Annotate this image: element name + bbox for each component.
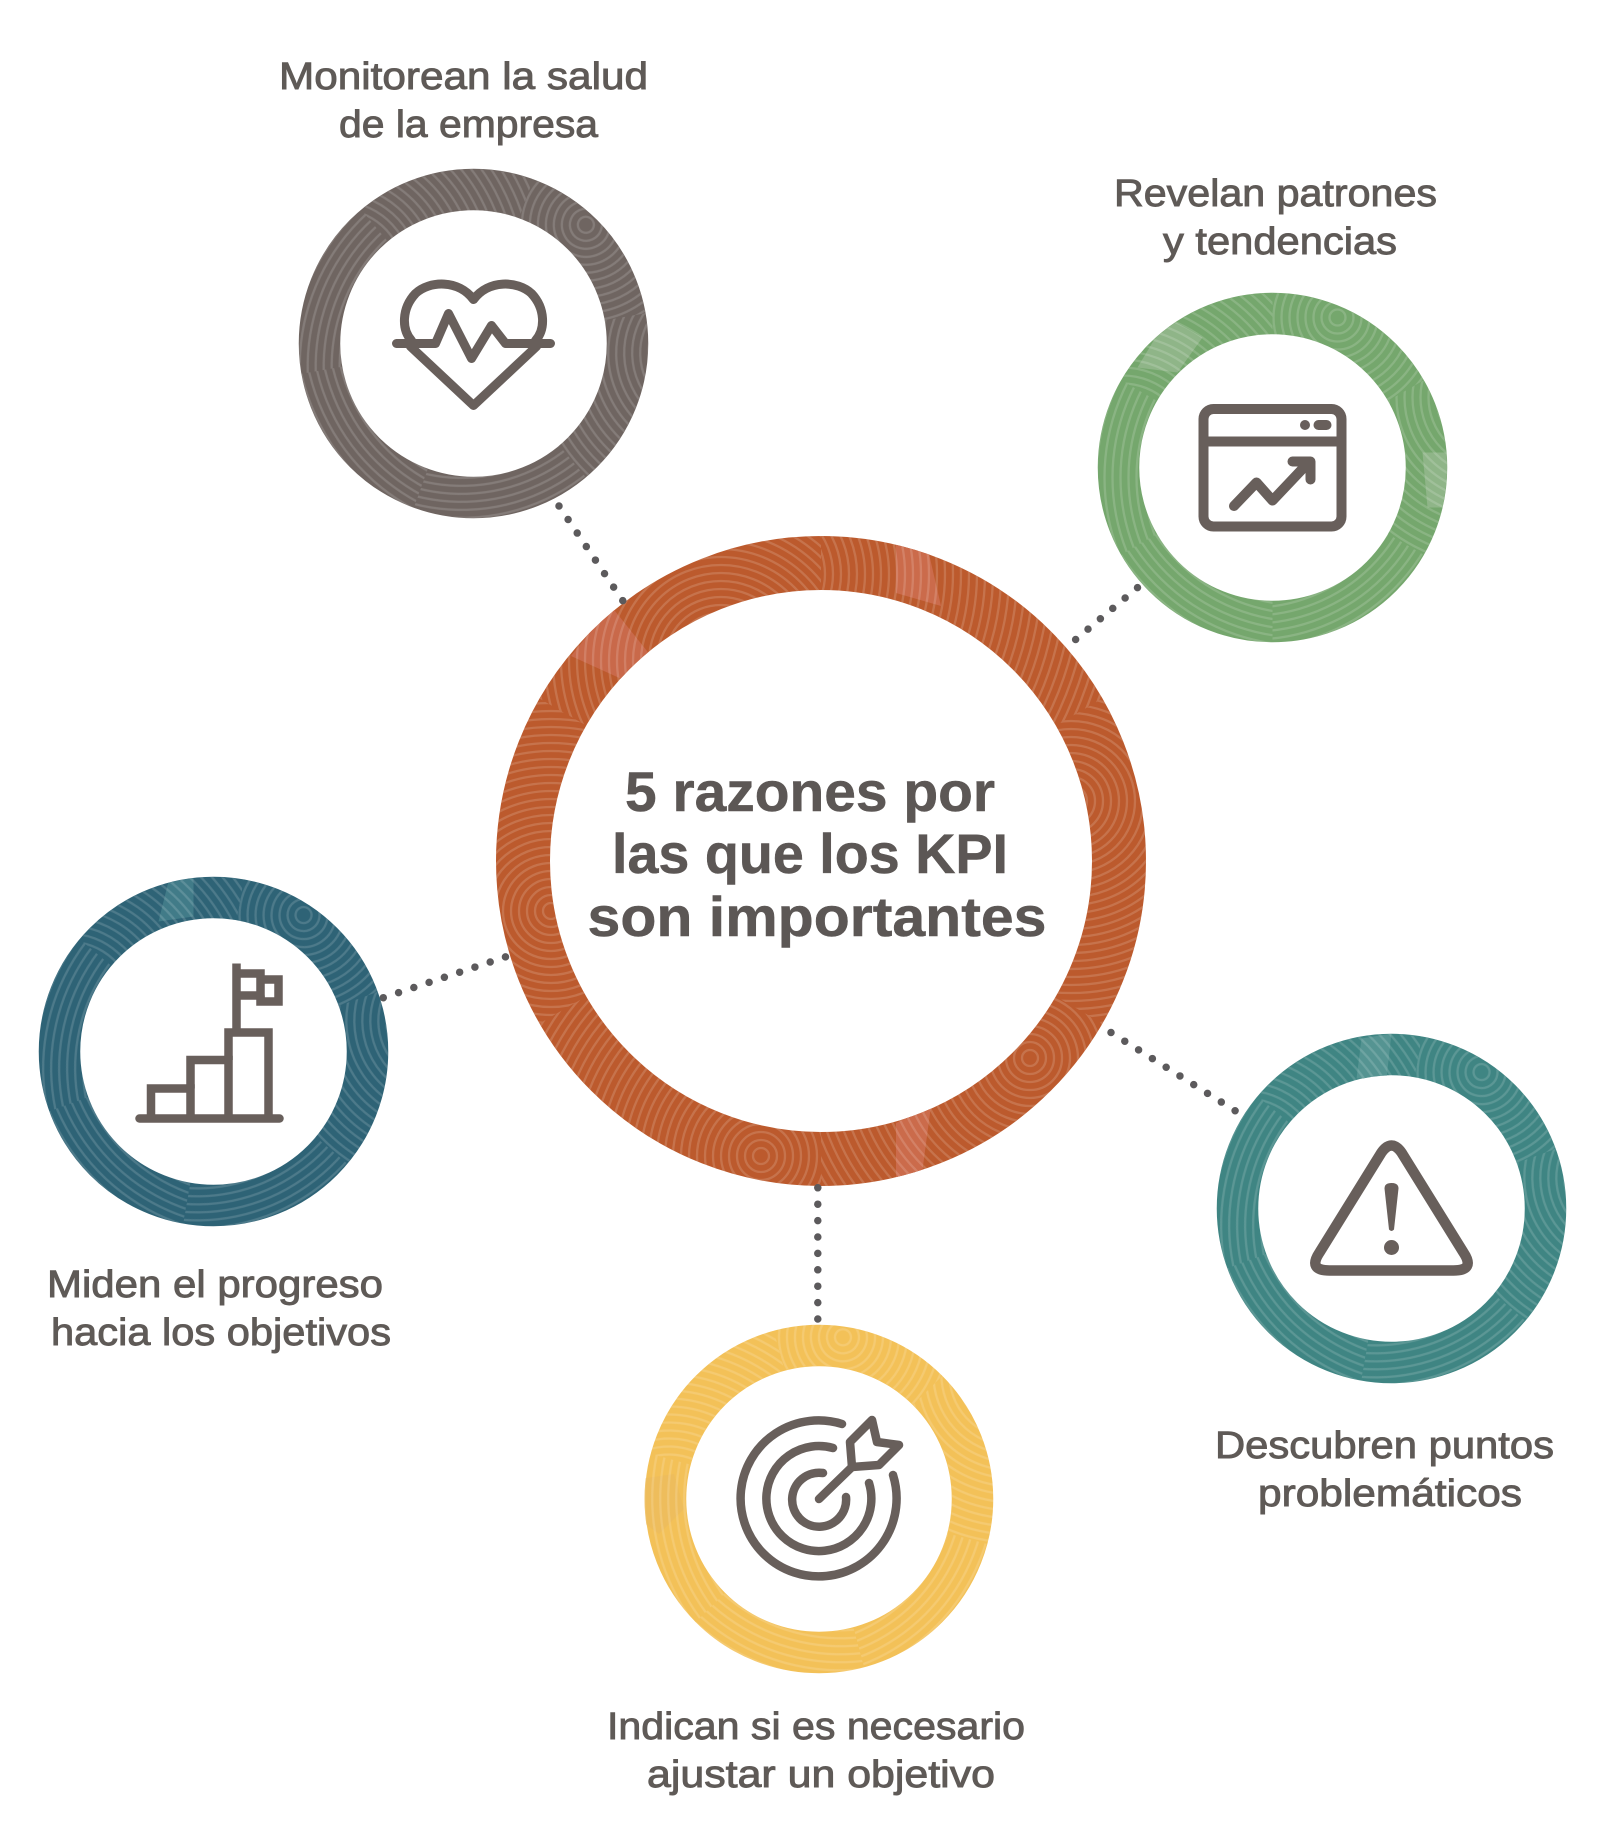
icon: warning triangle [1315, 1146, 1468, 1270]
heading: 5 razones por [625, 760, 995, 823]
connector dots: health to centre [559, 506, 623, 601]
central ring [491, 531, 1151, 1191]
icon: heartbeat [396, 284, 550, 406]
label: problems: problemáticos [1258, 1473, 1522, 1515]
panel: health ring and icon [298, 168, 648, 518]
connector dots: objective to centre [814, 1188, 822, 1320]
connector dots: patterns to centre [1075, 588, 1138, 640]
connector dots: progress to centre [383, 957, 506, 998]
panel: objective ring and icon [644, 1324, 994, 1674]
label: health: de la empresa [339, 104, 599, 146]
label: objective: ajustar un objetivo [647, 1754, 995, 1796]
heading [588, 760, 1046, 948]
label: objective [607, 1706, 1025, 1796]
heading: son importantes [588, 885, 1046, 948]
label: health: Monitorean la salud [279, 56, 648, 98]
label: problems: Descubren puntos [1215, 1425, 1554, 1467]
label: problems [1215, 1425, 1554, 1515]
label: progress: Miden el progreso [47, 1264, 383, 1306]
label: patterns: y tendencias [1163, 221, 1397, 263]
label: objective: Indican si es necesario [607, 1706, 1025, 1748]
icon: steps with flag [140, 964, 280, 1118]
icon: browser with trend arrow [1204, 409, 1342, 526]
panel: patterns ring and icon [1092, 288, 1452, 648]
connector dots: problems to centre [1111, 1032, 1236, 1111]
label: health [279, 56, 648, 146]
label: patterns: Revelan patrones [1114, 173, 1437, 215]
label: progress [47, 1264, 391, 1354]
label: progress: hacia los objetivos [51, 1312, 391, 1354]
panel: problems ring and icon [1216, 1034, 1566, 1384]
icon: target with arrow [741, 1420, 899, 1576]
panel: progress ring and icon [38, 876, 388, 1226]
heading: las que los KPI [612, 822, 1008, 885]
label: patterns [1114, 173, 1437, 263]
